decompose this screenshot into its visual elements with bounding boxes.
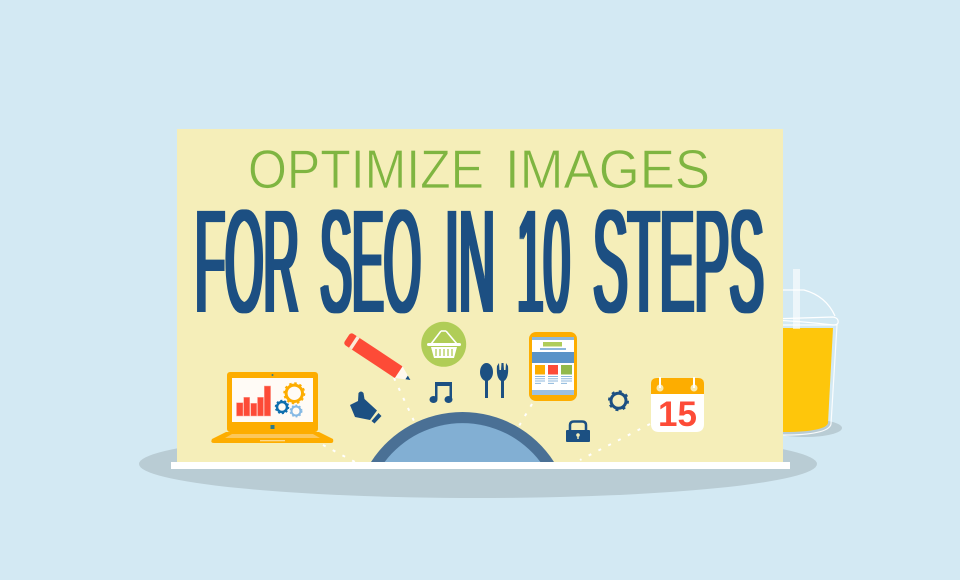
icon: calendar: 15 (658, 395, 697, 434)
icon: laptop (211, 372, 333, 443)
title line 1 (248, 138, 710, 200)
juice cup (768, 269, 842, 437)
icon: basket (421, 322, 466, 367)
ground shadow (139, 430, 817, 498)
icon: padlock (566, 422, 590, 442)
title line 1: IMAGES (505, 138, 710, 200)
title line 2: 10 (517, 180, 570, 344)
icon: gears (276, 383, 304, 417)
title line 1: OPTIMIZE (248, 138, 484, 200)
dotted connectors (323, 378, 650, 462)
icon: spoon and fork (480, 363, 508, 398)
icon: music note (430, 382, 452, 403)
icon: tablet (529, 332, 577, 401)
yellow panel (177, 129, 783, 462)
semicircle dome (371, 412, 554, 462)
icon: calendar (651, 377, 704, 434)
icon: thumbs up (350, 392, 382, 424)
title line 2: SEO (320, 180, 421, 344)
icon: gear (609, 391, 628, 410)
icon: pencil (343, 332, 414, 386)
title line 2 (195, 180, 764, 344)
title line 2: FOR (195, 180, 299, 344)
title line 2: IN (445, 180, 495, 344)
white shelf (171, 462, 790, 469)
bar chart (236, 386, 271, 416)
